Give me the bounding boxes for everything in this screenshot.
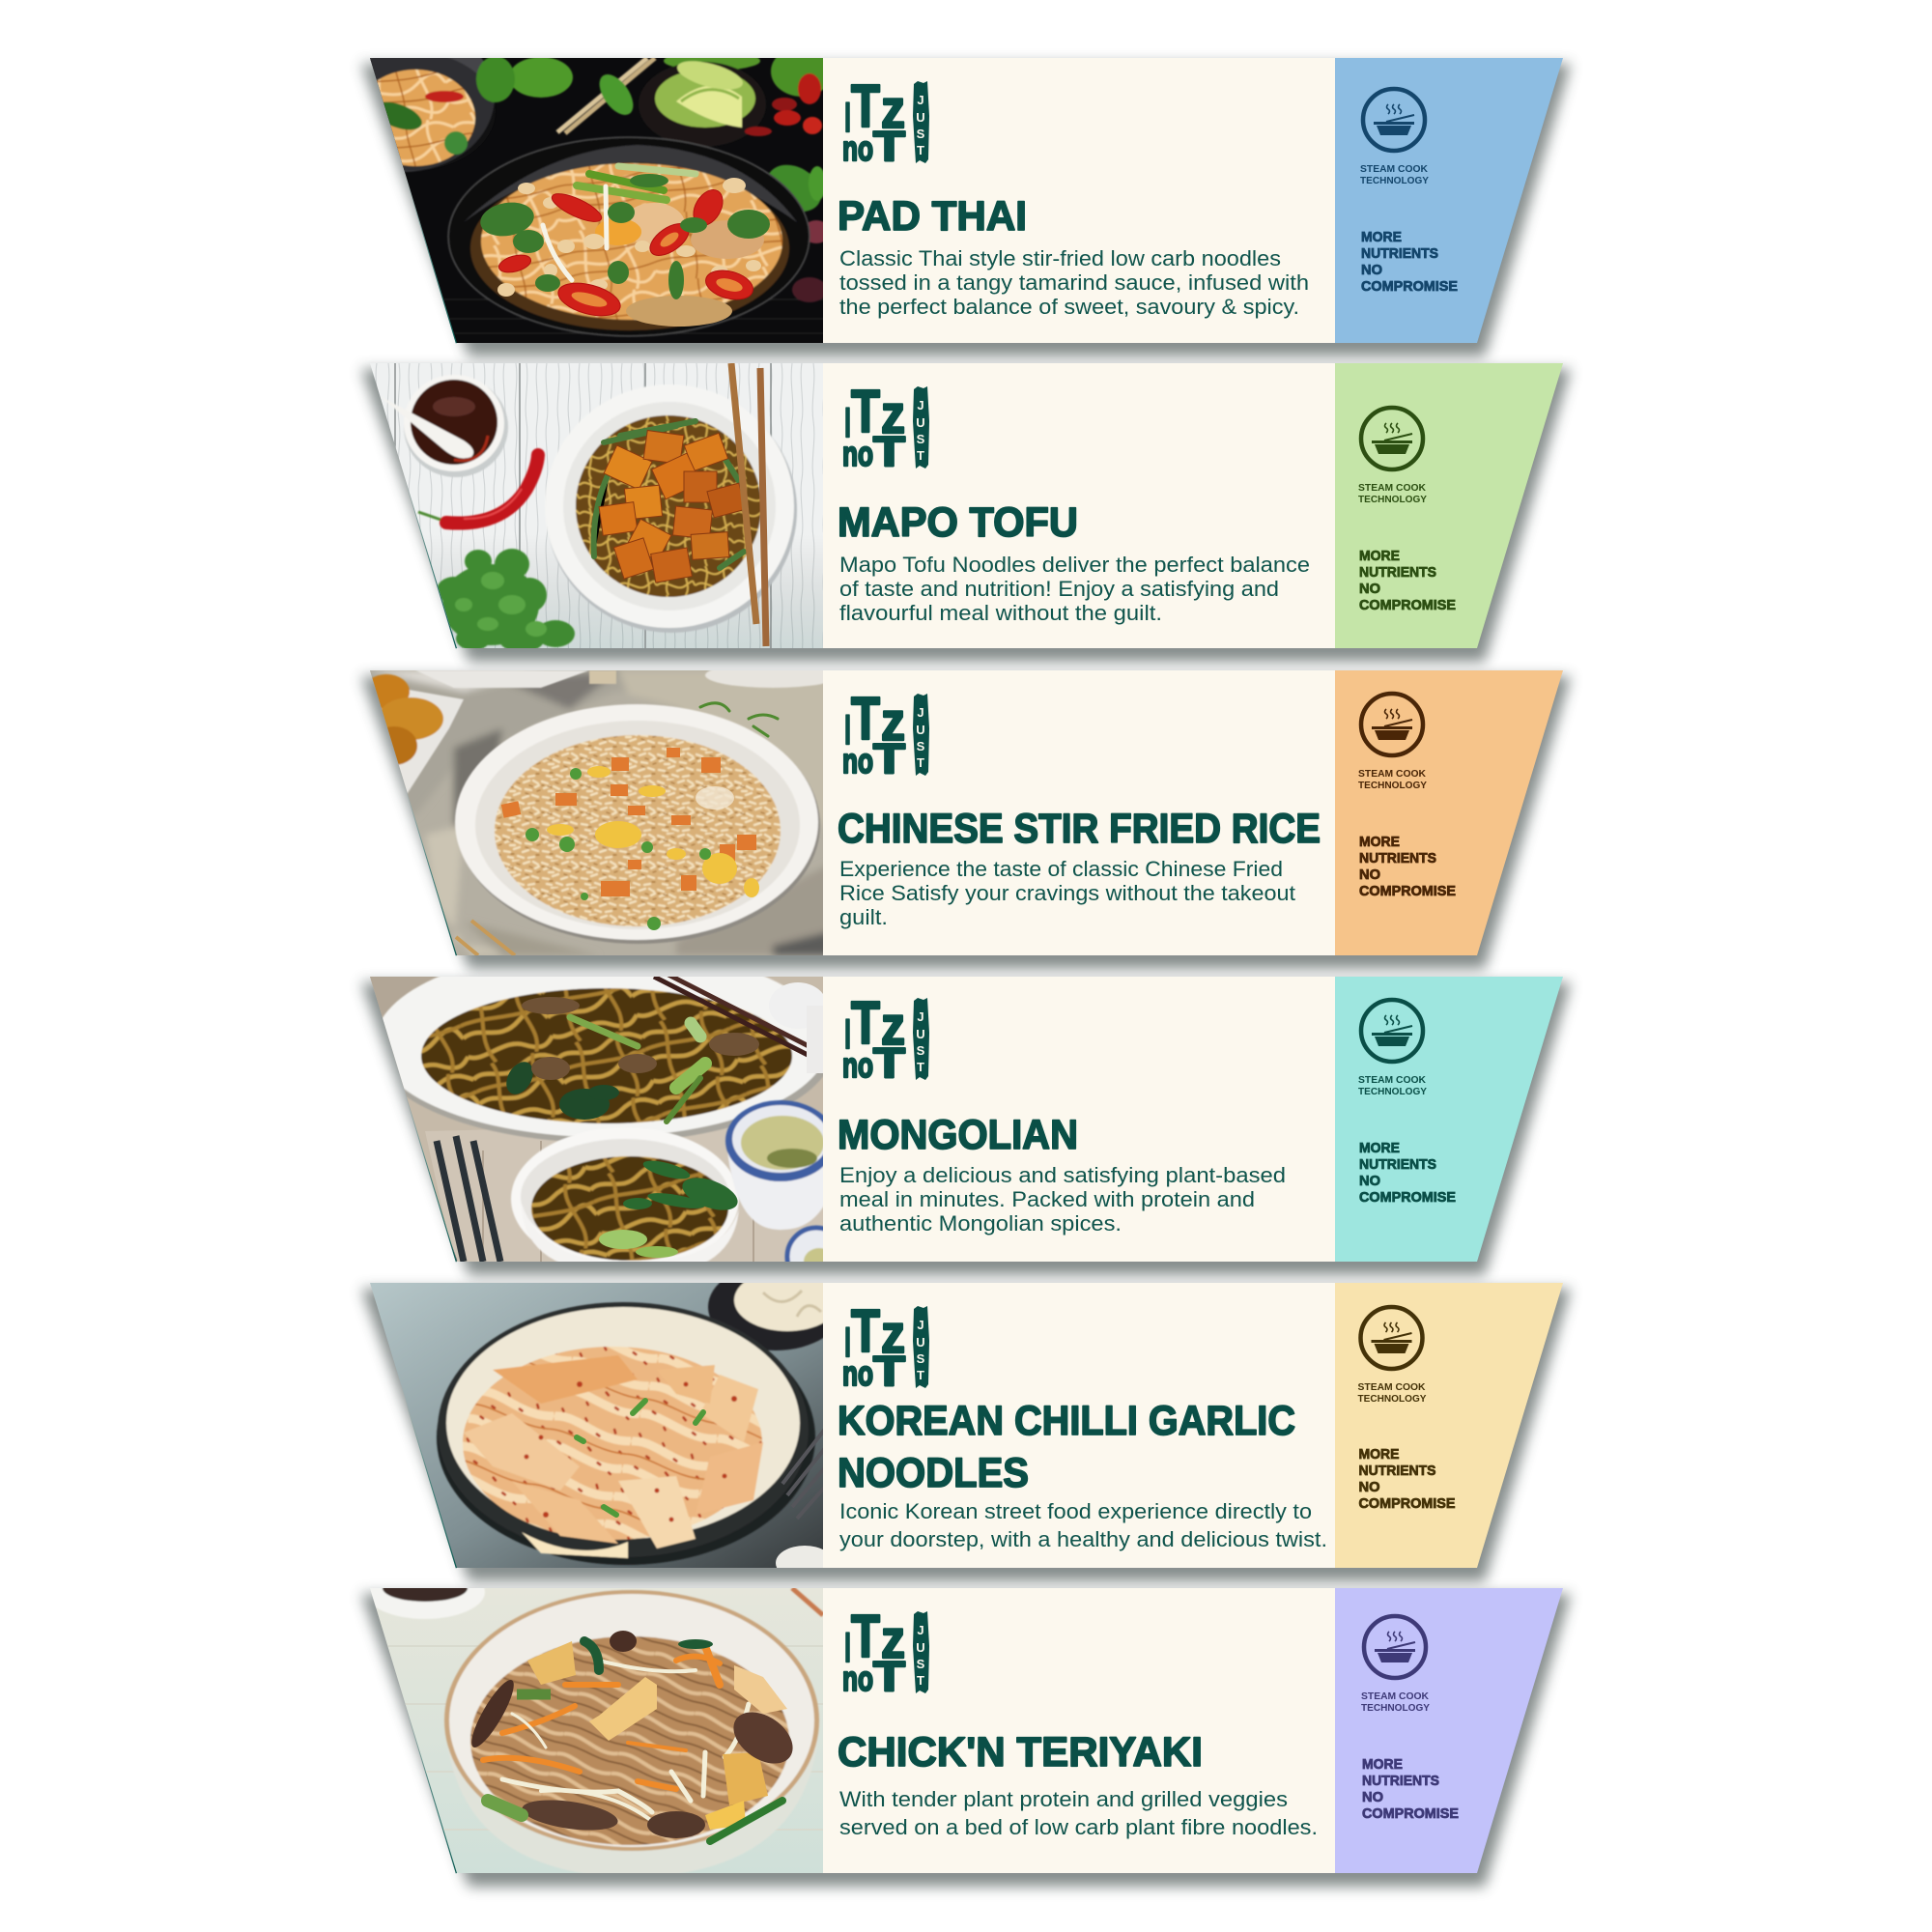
logo: U [916, 723, 925, 737]
steam cook badge [1360, 89, 1429, 186]
logo: ı [844, 387, 851, 448]
benefits text: MORE [1362, 1756, 1403, 1773]
description [839, 1499, 1327, 1551]
description: meal in minutes. Packed with protein and [839, 1187, 1255, 1211]
logo: T [851, 1604, 880, 1670]
benefits text [1359, 834, 1456, 899]
description: Mapo Tofu Noodles deliver the perfect balance [839, 553, 1310, 577]
benefits text: NO [1362, 1789, 1383, 1805]
benefits text [1359, 548, 1456, 613]
logo: no [842, 434, 873, 473]
description: the perfect balance of sweet, savoury & spicy. [839, 295, 1299, 319]
logo: no [842, 1659, 873, 1698]
panel: Chick'n Teriyaki [357, 1565, 1571, 1887]
logo: z [881, 1608, 905, 1669]
steam cook badge: STEAM COOK [1361, 1690, 1429, 1702]
side panel [1335, 977, 1563, 1262]
logo: T [917, 755, 924, 770]
description: guilt. [839, 905, 888, 929]
side panel [1335, 363, 1563, 648]
steam cook badge: TECHNOLOGY [1360, 175, 1429, 186]
benefits text: COMPROMISE [1361, 278, 1458, 295]
description: your doorstep, with a healthy and delicious twist. [839, 1527, 1327, 1551]
logo: J [917, 398, 924, 412]
logo: S [917, 1351, 925, 1366]
benefits text: COMPROMISE [1359, 1189, 1456, 1206]
logo: U [916, 1335, 925, 1350]
logo: S [917, 432, 925, 446]
logo: ı [844, 1612, 851, 1673]
photo: mapo tofu bowl [357, 363, 831, 652]
logo: T [873, 123, 905, 170]
cream text block [823, 58, 1335, 343]
benefits text: MORE [1361, 229, 1402, 245]
cream text block [823, 363, 1335, 648]
logo: z [881, 691, 905, 752]
benefits text: MORE [1359, 1140, 1400, 1156]
benefits text [1358, 1446, 1455, 1512]
logo: T [851, 686, 880, 753]
photo: korean chilli noodles [370, 1283, 823, 1568]
logo: no [842, 1353, 873, 1393]
logo: T [851, 1298, 880, 1365]
heading: KOREAN CHILLI GARLIC [838, 1398, 1295, 1444]
logo: J [917, 705, 924, 720]
logo: ı [844, 1307, 851, 1368]
description: tossed in a tangy tamarind sauce, infused with [839, 270, 1309, 295]
benefits text: NUTRIENTS [1358, 1463, 1435, 1479]
benefits text: COMPROMISE [1359, 597, 1456, 613]
description: served on a bed of low carb plant fibre noodles. [839, 1815, 1318, 1839]
benefits text: MORE [1359, 834, 1400, 850]
description: With tender plant protein and grilled veggies [839, 1787, 1288, 1811]
logo: S [917, 739, 925, 753]
logo: S [917, 127, 925, 141]
logo: T [917, 1673, 924, 1688]
steam cook badge: STEAM COOK [1360, 163, 1428, 175]
heading: MONGOLIAN [838, 1112, 1078, 1158]
benefits text: NO [1358, 1479, 1380, 1495]
logo: T [851, 73, 880, 140]
logo: U [916, 110, 925, 125]
steam cook badge: TECHNOLOGY [1358, 1086, 1427, 1097]
steam cook badge [1361, 1616, 1430, 1714]
photo: mongolian noodles [370, 977, 823, 1262]
description: Enjoy a delicious and satisfying plant-based [839, 1163, 1286, 1187]
logo: T [851, 379, 880, 445]
logo: T [873, 1039, 905, 1087]
description: Classic Thai style stir-fried low carb noodles [839, 246, 1281, 270]
description: authentic Mongolian spices. [839, 1211, 1122, 1236]
logo [842, 1604, 929, 1700]
panel: Mapo Tofu [357, 363, 1571, 662]
logo: S [917, 1043, 925, 1058]
cream text block [823, 977, 1335, 1262]
cream text block [823, 670, 1335, 955]
logo: T [851, 990, 880, 1057]
logo: ı [844, 695, 851, 755]
steam cook badge [1358, 1000, 1427, 1097]
logo: J [917, 93, 924, 107]
steam cook badge [1358, 408, 1427, 505]
benefits text: COMPROMISE [1359, 883, 1456, 899]
benefits text: NO [1359, 1173, 1380, 1189]
benefits text: NO [1361, 262, 1382, 278]
benefits text: NUTRIENTS [1359, 1156, 1436, 1173]
logo: z [881, 78, 905, 139]
logo: no [842, 1045, 873, 1085]
steam cook badge: TECHNOLOGY [1358, 1393, 1426, 1405]
panel: Chinese Stir Fried Rice [357, 663, 1571, 969]
logo [842, 73, 929, 170]
steam cook badge: TECHNOLOGY [1358, 780, 1427, 791]
photo: pad thai bowl [370, 58, 823, 343]
steam cook badge: STEAM COOK [1358, 1381, 1426, 1393]
logo: S [917, 1657, 925, 1671]
heading: PAD THAI [838, 193, 1027, 240]
heading: NOODLES [838, 1450, 1029, 1496]
benefits text: NUTRIENTS [1362, 1773, 1439, 1789]
benefits text: MORE [1359, 548, 1400, 564]
benefits text: NUTRIENTS [1359, 850, 1436, 867]
benefits text: COMPROMISE [1362, 1805, 1459, 1822]
logo: J [917, 1623, 924, 1637]
steam cook badge: TECHNOLOGY [1361, 1702, 1430, 1714]
benefits text: NO [1359, 867, 1380, 883]
cream text block [823, 1283, 1335, 1568]
logo: T [873, 1348, 905, 1395]
description: of taste and nutrition! Enjoy a satisfying and [839, 577, 1279, 601]
logo: T [917, 1368, 924, 1382]
steam cook badge [1358, 694, 1427, 791]
logo: no [842, 128, 873, 168]
side panel [1335, 1283, 1563, 1568]
description [839, 553, 1310, 625]
benefits text: NO [1359, 581, 1380, 597]
benefits text [1362, 1756, 1459, 1822]
description: Iconic Korean street food experience directly to [839, 1499, 1312, 1523]
panel: Pad Thai [355, 54, 1577, 363]
steam cook badge: TECHNOLOGY [1358, 494, 1427, 505]
steam cook badge: STEAM COOK [1358, 482, 1426, 494]
photo: fried rice plate [357, 663, 840, 955]
description: Rice Satisfy your cravings without the takeout [839, 881, 1296, 905]
heading: CHICK'N TERIYAKI [838, 1729, 1203, 1776]
logo: U [916, 1027, 925, 1041]
benefits text: MORE [1358, 1446, 1399, 1463]
description: flavourful meal without the guilt. [839, 601, 1162, 625]
logo: J [917, 1318, 924, 1332]
logo: T [917, 1060, 924, 1074]
photo: teriyaki noodles bowl [370, 1588, 823, 1873]
logo: z [881, 1303, 905, 1364]
benefits text: NUTRIENTS [1361, 245, 1438, 262]
logo: J [917, 1009, 924, 1024]
logo: U [916, 415, 925, 430]
side panel [1335, 1588, 1563, 1873]
benefits text: COMPROMISE [1358, 1495, 1455, 1512]
logo [842, 686, 929, 782]
description [839, 857, 1296, 929]
side panel [1335, 58, 1563, 343]
steam cook badge: STEAM COOK [1358, 1074, 1426, 1086]
description [839, 246, 1309, 319]
description: Experience the taste of classic Chinese Fried [839, 857, 1283, 881]
panel: Korean Chilli Garlic Noodles [357, 1264, 1571, 1581]
logo: z [881, 384, 905, 444]
logo [842, 1298, 929, 1395]
benefits text: NUTRIENTS [1359, 564, 1436, 581]
logo: ı [844, 82, 851, 143]
steam cook badge [1358, 1307, 1426, 1405]
heading [838, 1398, 1295, 1496]
benefits text [1359, 1140, 1456, 1206]
steam cook badge: STEAM COOK [1358, 768, 1426, 780]
logo: T [917, 143, 924, 157]
description [839, 1787, 1318, 1839]
side panel [1335, 670, 1563, 955]
logo [842, 990, 929, 1087]
logo: T [873, 1653, 905, 1700]
logo: T [917, 448, 924, 463]
logo: no [842, 741, 873, 781]
logo: z [881, 995, 905, 1056]
logo: T [873, 428, 905, 475]
benefits text [1361, 229, 1458, 295]
panel: Mongolian [357, 948, 1571, 1286]
heading: CHINESE STIR FRIED RICE [838, 806, 1321, 852]
logo: T [873, 735, 905, 782]
cream text block [823, 1588, 1335, 1873]
logo: U [916, 1640, 925, 1655]
logo: ı [844, 999, 851, 1060]
heading: MAPO TOFU [838, 499, 1078, 546]
logo [842, 379, 929, 475]
description [839, 1163, 1286, 1236]
